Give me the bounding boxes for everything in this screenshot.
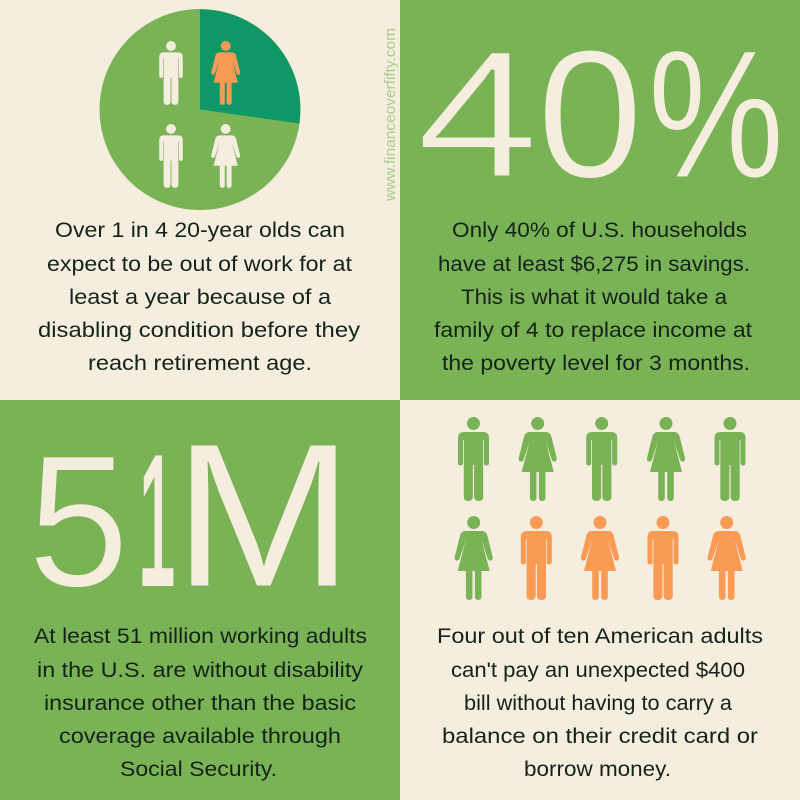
icon: orange man 1 [521, 516, 552, 600]
icon: orange woman 2 [708, 516, 746, 600]
icon: green woman 3 [455, 516, 493, 600]
text block: 51M description: coverage available through [59, 725, 341, 748]
text block: four in ten description: balance on their credit card or [442, 725, 758, 748]
text block: 40% description: the poverty level for 3 months. [442, 352, 750, 375]
text block: 51M description [34, 625, 367, 781]
text block: 51M description: Social Security. [120, 758, 277, 781]
text block: 51M description: At least 51 million working adults [34, 625, 367, 648]
panel: bottom-left background [0, 400, 400, 800]
text block: four in ten description: Four out of ten American adults [437, 625, 763, 648]
icon: man top-left in pie [159, 41, 183, 105]
panel: bottom-right background [400, 400, 800, 800]
text block: four in ten description [437, 625, 763, 781]
pie chart: 1 in 4 [100, 9, 300, 210]
text block: 1 in 4 description: expect to be out of work for at [47, 253, 352, 276]
text block: 1 in 4 description: disabling condition before they [38, 319, 361, 342]
icon: orange woman 1 [581, 516, 619, 600]
pictogram: ten adults, four highlighted [455, 417, 746, 600]
icon: man bottom-left in pie [159, 124, 183, 188]
text block: four in ten description: can't pay an unexpected $400 [451, 659, 745, 682]
icon: woman highlighted in pie [211, 41, 240, 105]
icon: green man 1 [458, 417, 489, 501]
watermark: website: www.financeoverfifty.com [382, 28, 399, 202]
text block: 40% description: Only 40% of U.S. households [452, 219, 747, 242]
text block: 40% description: have at least $6,275 in savings. [438, 253, 750, 276]
text block: 1 in 4 description: reach retirement age. [88, 352, 312, 375]
text block: 40% description: family of 4 to replace income at [434, 319, 752, 342]
icon: green woman 1 [519, 417, 557, 501]
big number: 51M [28, 401, 354, 630]
text block: four in ten description: borrow money. [524, 758, 671, 781]
panel: top-left background [0, 0, 400, 400]
big number: 51M: M [173, 401, 354, 630]
panel: top-right background [400, 0, 800, 400]
text block: 51M description: insurance other than the basic [44, 692, 356, 715]
icon: green man 3 [714, 417, 746, 501]
icon: orange man 2 [648, 516, 678, 600]
text block: four in ten description: bill without having to carry a [464, 692, 732, 715]
icon: green woman 2 [647, 417, 685, 501]
icon: green man 2 [586, 417, 617, 501]
big number: 51M: 1 [138, 417, 176, 623]
big number: 40%: 4 [416, 12, 539, 216]
big number: 40%: 0 [537, 12, 643, 216]
text block: 40% description [434, 219, 752, 375]
text block: 1 in 4 description: Over 1 in 4 20-year olds can [55, 219, 345, 242]
big number: 51M: 5 [28, 416, 129, 626]
icon: woman bottom-right in pie [211, 124, 240, 188]
text block: 1 in 4 description: least a year because of a [69, 286, 331, 309]
text block: 1 in 4 description [38, 219, 361, 375]
text block: 40% description: This is what it would take a [461, 286, 727, 309]
big number: 40% [416, 12, 784, 216]
text block: 51M description: in the U.S. are without disability [37, 659, 364, 682]
